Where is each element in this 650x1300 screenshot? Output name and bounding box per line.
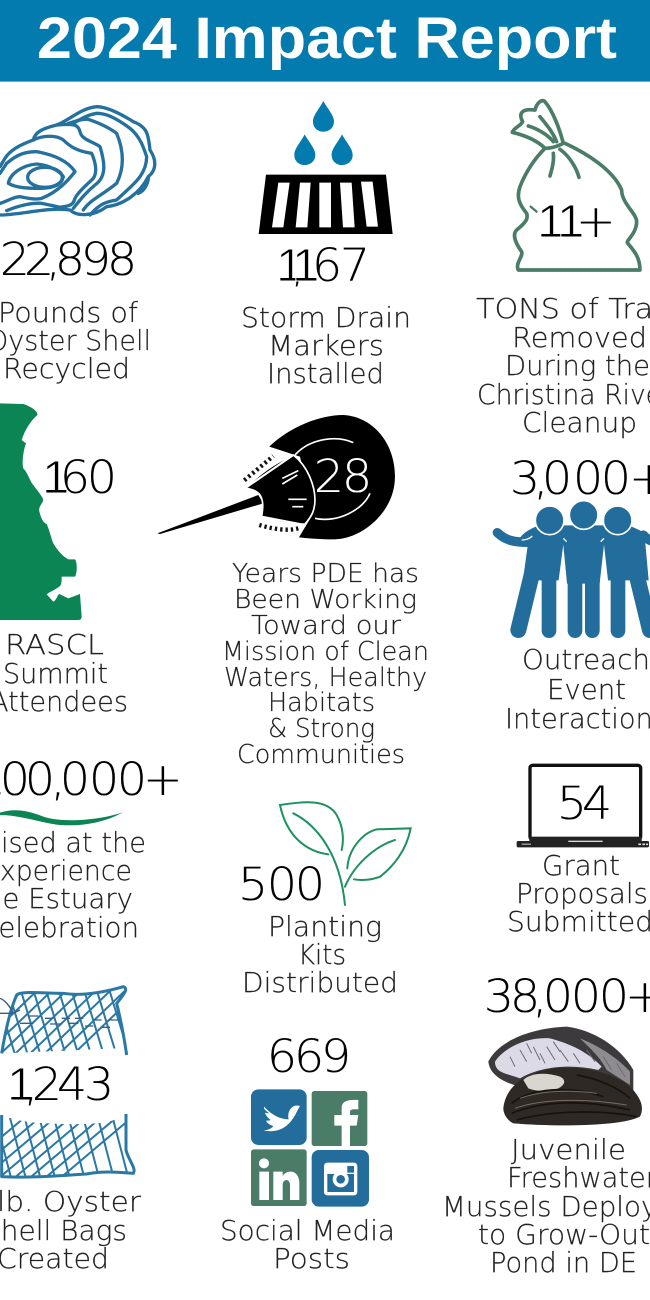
label: Markers bbox=[268, 330, 384, 362]
stat: outreach interactions bbox=[497, 452, 650, 735]
stat: freshwater mussels bbox=[442, 970, 650, 1279]
icon: water drops and storm drain bbox=[259, 101, 393, 234]
number: 67 bbox=[312, 239, 370, 292]
label bbox=[222, 559, 429, 770]
label bbox=[0, 1186, 142, 1275]
stat: oyster shell bags bbox=[0, 983, 147, 1275]
icon: oyster shell bbox=[0, 107, 155, 215]
label: & Strong bbox=[268, 714, 375, 744]
stat: planting kits bbox=[238, 802, 411, 999]
label bbox=[0, 827, 146, 944]
icon: facebook bbox=[312, 1091, 367, 1146]
label: Mission of Clean bbox=[222, 637, 429, 667]
label: RASCL bbox=[5, 629, 104, 661]
label: Juvenile bbox=[511, 1134, 626, 1166]
label: Storm Drain bbox=[241, 302, 411, 334]
stat: oyster shell recycled bbox=[0, 107, 155, 385]
label: Proposals bbox=[516, 878, 648, 910]
label bbox=[507, 850, 650, 938]
label: Been Working bbox=[234, 585, 417, 615]
icon: twitter bbox=[251, 1089, 307, 1145]
stat: years working bbox=[157, 415, 429, 770]
number: 500 bbox=[238, 858, 325, 911]
label: Planting bbox=[268, 911, 382, 943]
label bbox=[476, 293, 650, 439]
label: Waters, Healthy bbox=[224, 663, 427, 693]
label: Pond in DE bbox=[490, 1247, 637, 1279]
heading: 2024 Impact Report bbox=[37, 6, 617, 71]
label: Recycled bbox=[3, 353, 130, 385]
number: 60 bbox=[60, 451, 117, 504]
icon: Delaware map bbox=[0, 403, 82, 620]
label: Kits bbox=[298, 939, 346, 971]
number: 1 bbox=[276, 240, 303, 292]
stat: tons of trash bbox=[476, 101, 650, 439]
icon: horseshoe crab bbox=[157, 415, 395, 539]
icon: linkedin bbox=[251, 1149, 307, 1206]
icon: three people bbox=[497, 501, 650, 631]
label: Habitats bbox=[268, 688, 375, 718]
label: Summit bbox=[3, 658, 108, 690]
label bbox=[220, 1215, 395, 1275]
label: Toward our bbox=[251, 611, 402, 641]
icon: instagram bbox=[312, 1150, 369, 1207]
label: Posts bbox=[273, 1243, 350, 1275]
label: Removed bbox=[512, 322, 647, 354]
stat: RASCL summit attendees bbox=[0, 403, 128, 718]
number: 1 bbox=[7, 1059, 34, 1111]
icon: laptop bbox=[517, 765, 649, 847]
number: 1 bbox=[42, 452, 69, 504]
label: Installed bbox=[267, 358, 384, 390]
label bbox=[0, 297, 151, 385]
icon: green swoosh bbox=[0, 810, 123, 825]
number: 00,000+ bbox=[0, 753, 183, 806]
stat: storm drain markers bbox=[241, 101, 411, 390]
label: Outreach bbox=[522, 644, 650, 676]
label: Social Media bbox=[220, 1215, 395, 1247]
label bbox=[505, 644, 650, 735]
label: Event bbox=[547, 674, 626, 706]
number: 22,898 bbox=[0, 233, 137, 286]
icon: mesh bag bbox=[0, 983, 147, 1187]
label: Created bbox=[0, 1243, 109, 1275]
number: 28 bbox=[314, 450, 372, 503]
label bbox=[241, 302, 411, 390]
stat: raised at celebration bbox=[0, 753, 183, 944]
label: to Grow-Out bbox=[478, 1219, 650, 1251]
label bbox=[0, 629, 128, 718]
number: ,243 bbox=[23, 1058, 114, 1111]
label: During the bbox=[505, 350, 650, 382]
icon: social media tiles bbox=[251, 1089, 369, 1207]
number: 1 bbox=[292, 240, 319, 292]
number: , bbox=[290, 239, 306, 292]
number: 669 bbox=[267, 1030, 351, 1083]
label: Pounds of bbox=[0, 297, 138, 329]
label: Communities bbox=[237, 740, 405, 770]
label: Cleanup bbox=[522, 407, 637, 439]
label: Grant bbox=[542, 850, 620, 882]
stat: grant proposals bbox=[507, 765, 650, 938]
number: 11 bbox=[537, 196, 584, 248]
stat: social media posts bbox=[220, 1030, 395, 1275]
label: Distributed bbox=[242, 967, 398, 999]
number: + bbox=[576, 195, 616, 248]
label bbox=[242, 911, 398, 999]
icon: mussels bbox=[488, 1027, 642, 1125]
label: Years PDE has bbox=[232, 559, 419, 589]
number: 54 bbox=[557, 777, 612, 830]
label: Submitted bbox=[507, 906, 650, 938]
title banner bbox=[0, 0, 650, 82]
icon: trash bag bbox=[512, 101, 640, 270]
icon: seedling bbox=[280, 802, 411, 905]
label bbox=[442, 1134, 650, 1279]
